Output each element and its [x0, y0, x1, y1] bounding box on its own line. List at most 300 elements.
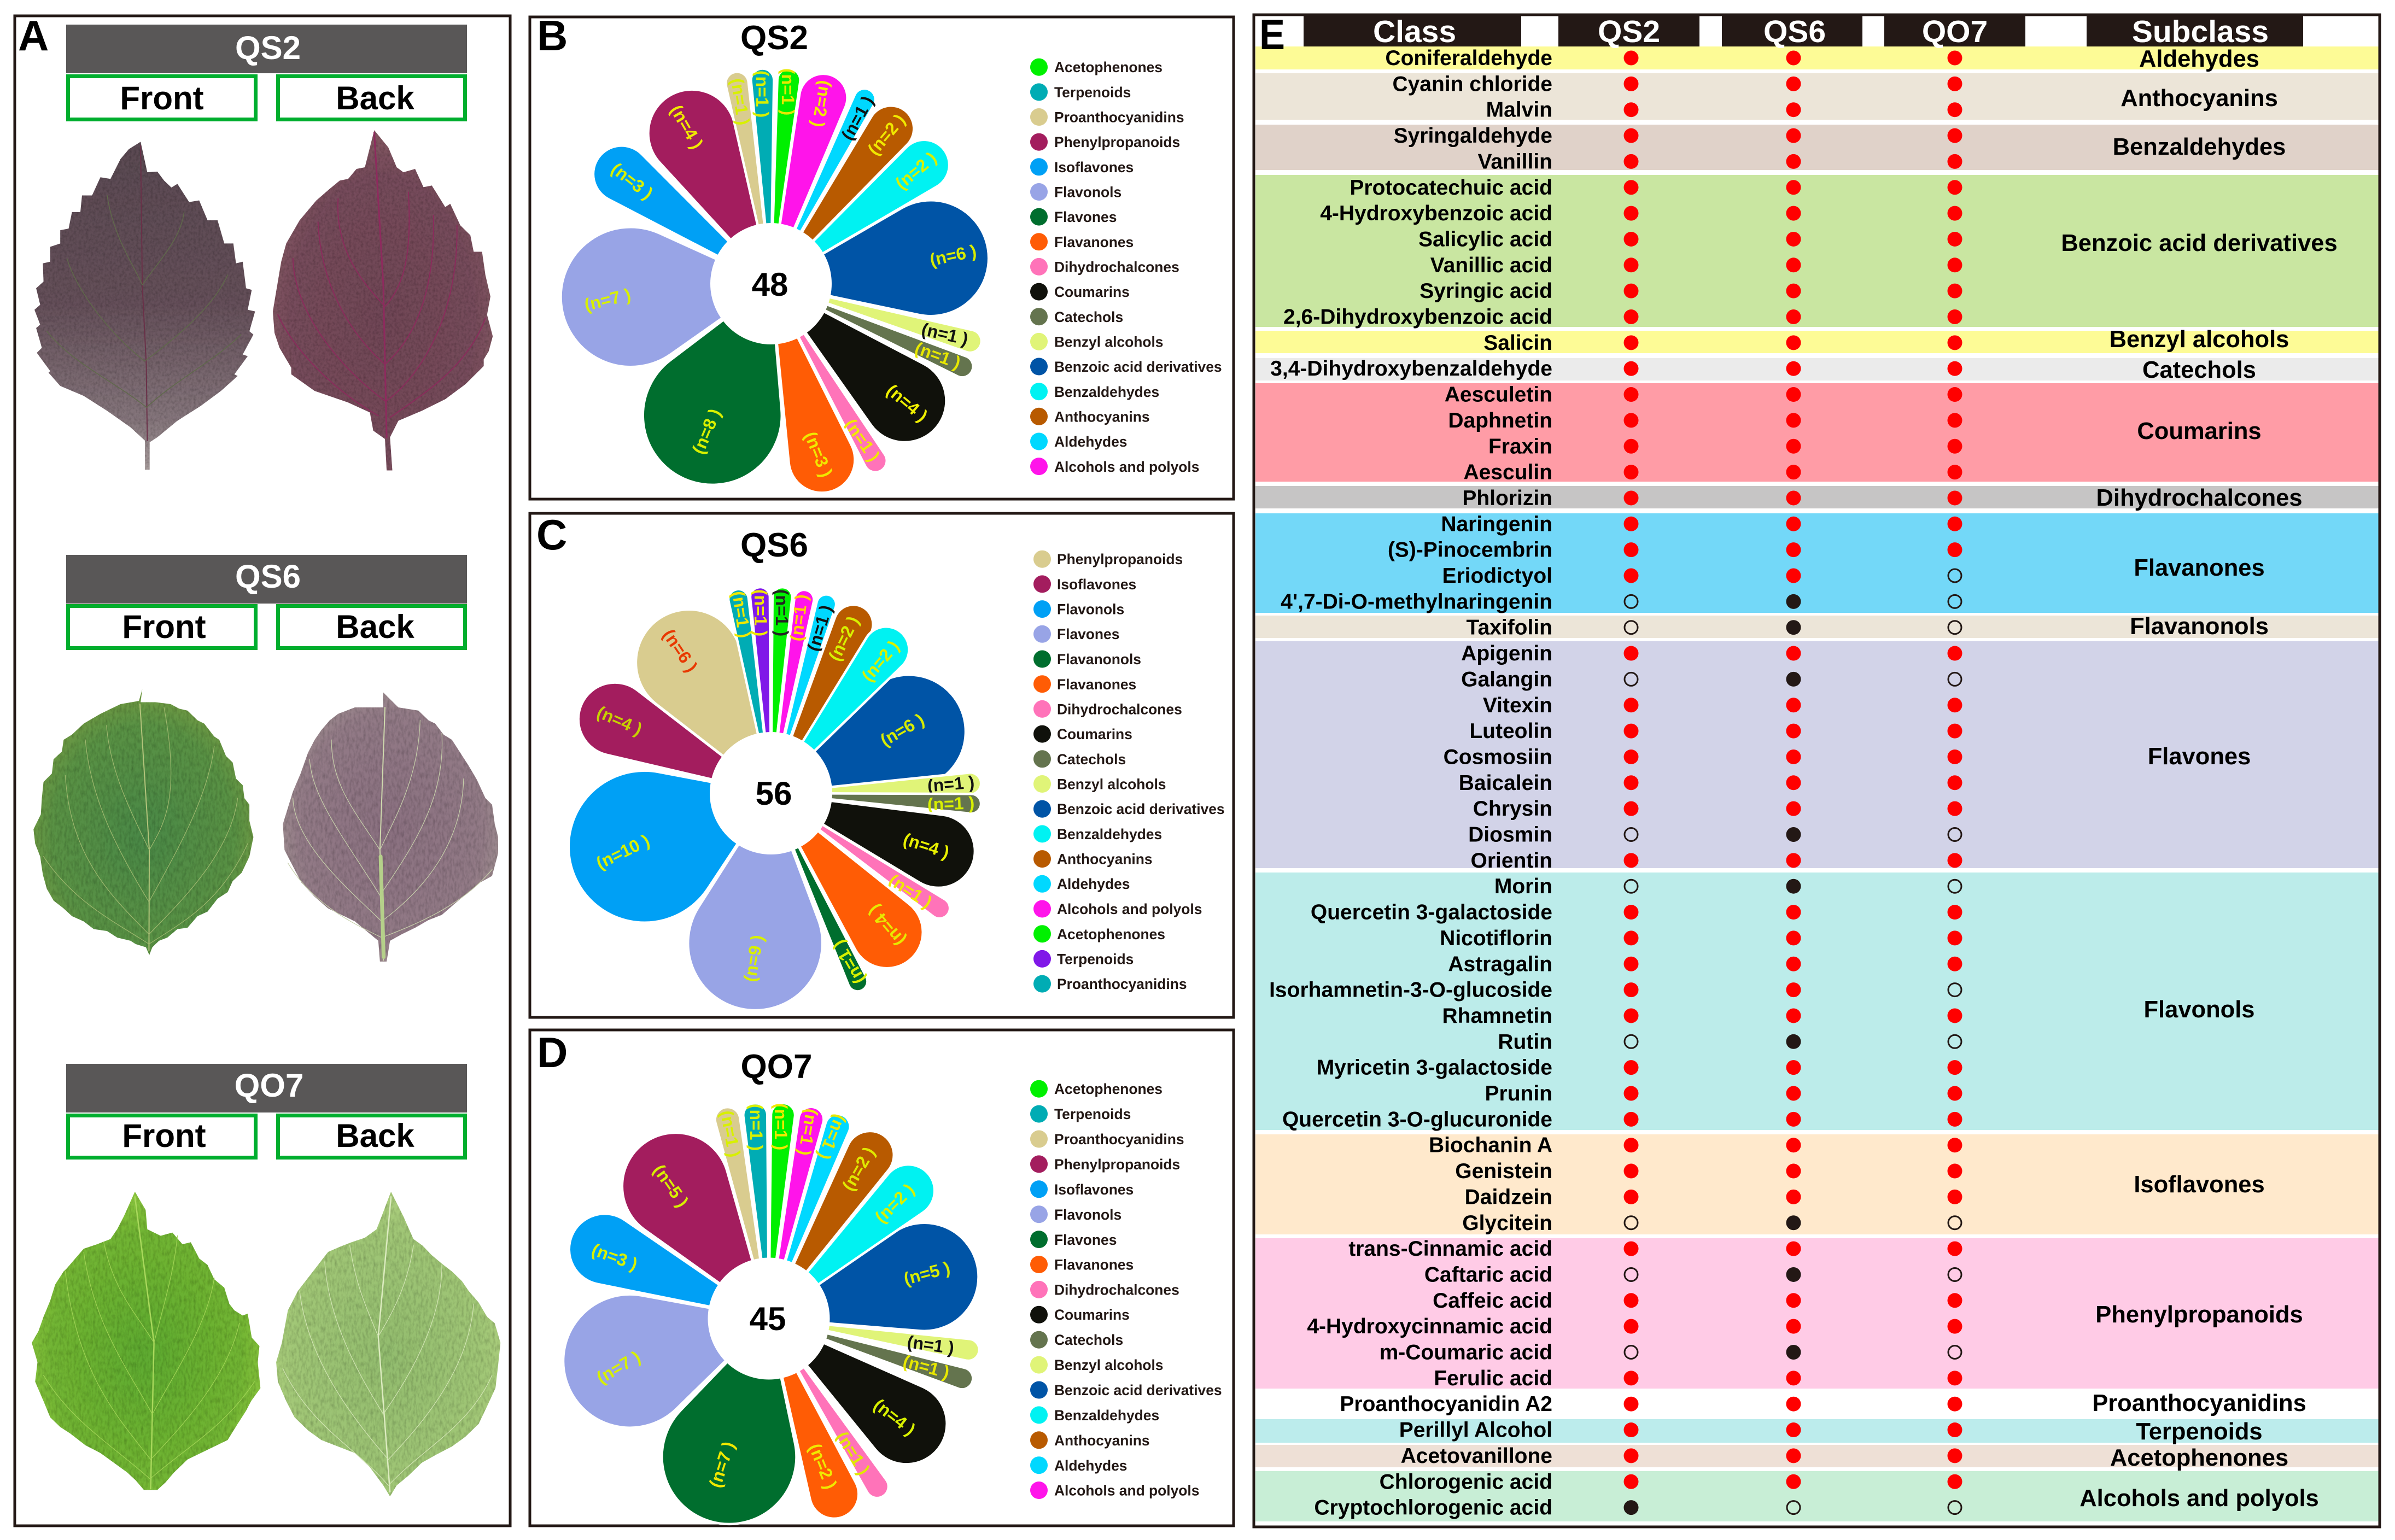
subclass: Dihydrochalcones: Dihydrochalcones — [2096, 485, 2303, 511]
petal: Flavonols — [547, 1255, 788, 1444]
row: Cosmosiin — [1444, 745, 1962, 769]
subclass: Coumarins: Coumarins — [2137, 418, 2262, 444]
petal: Flavonols — [545, 723, 801, 946]
legend: QS6 classes — [1033, 551, 1225, 993]
row: Biochanin A — [1429, 1134, 1962, 1157]
legend: Benzoic acid derivatives: Benzoic acid derivatives — [1054, 1382, 1222, 1398]
header: QS6 — [66, 555, 467, 604]
petal: Isoflavones: (n=4 ) — [594, 702, 645, 739]
center circle: total 56: 56 — [756, 775, 792, 812]
row: Chlorogenic acid: Chlorogenic acid — [1380, 1470, 1552, 1494]
petal: Flavanones — [739, 274, 863, 501]
petal: Benzoic acid derivatives: (n=6 ) — [928, 241, 978, 270]
row: (S)-Pinocembrin: (S)-Pinocembrin — [1388, 538, 1552, 562]
row: Astragalin — [1448, 952, 1962, 976]
row: Vitexin — [1483, 694, 1962, 717]
subclass: Anthocyanins: Anthocyanins — [2121, 85, 2278, 112]
petal: Dihydrochalcones: (n=1 ) — [841, 415, 884, 465]
petal: Dihydrochalcones — [759, 1313, 893, 1502]
legend: Flavonols — [1030, 1205, 1121, 1223]
row: 4',7-Di-O-methylnaringenin: 4',7-Di-O-methylnaringenin — [1281, 590, 1552, 613]
table frame — [1254, 15, 2380, 1527]
row: 4',7-Di-O-methylnaringenin — [1281, 590, 1961, 613]
petal: Benzoic acid derivatives — [762, 192, 997, 341]
row: Caftaric acid — [1424, 1263, 1961, 1286]
panel letter E: E — [1259, 10, 1285, 58]
row: Eriodictyol: Eriodictyol — [1442, 564, 1552, 588]
petal: Terpenoids — [743, 1103, 781, 1319]
row: Genistein — [1455, 1160, 1962, 1183]
petal: Anthocyanins: (n=2 ) — [825, 613, 863, 664]
row: Salicin — [1483, 331, 1962, 355]
petal: Flavanones: (n=3 ) — [801, 429, 837, 480]
petal: Alcohols and polyols — [757, 1105, 826, 1321]
legend: Acetophenones: Acetophenones — [1054, 59, 1163, 75]
petal: Aldehydes — [757, 1110, 854, 1323]
petal: Benzyl alcohols — [768, 273, 984, 355]
subclass: Benzaldehydes: Benzaldehydes — [2113, 134, 2286, 160]
row: Salicin: Salicin — [1483, 331, 1552, 355]
row: Myricetin 3-galactoside — [1317, 1056, 1962, 1080]
band: Flavonols — [1255, 873, 2379, 1130]
petal: Anthocyanins — [753, 598, 880, 802]
row: Luteolin — [1469, 719, 1962, 743]
row: Rhamnetin: Rhamnetin — [1442, 1004, 1552, 1028]
panel C: QS6 petal chart — [530, 511, 1234, 1017]
row: Cyanin chloride — [1392, 72, 1962, 96]
petal: Proanthocyanidins: (n=1 ) — [727, 77, 753, 126]
band: Isoflavones — [1255, 1134, 2379, 1234]
legend: Flavanones: Flavanones — [1054, 234, 1134, 250]
band: Coumarins — [1255, 383, 2379, 482]
subclass: Benzyl alcohols: Benzyl alcohols — [2110, 326, 2289, 353]
row: Protocatechuic acid: Protocatechuic acid — [1350, 176, 1552, 200]
row: Proanthocyanidin A2 — [1340, 1392, 1962, 1416]
petal: Isoflavones: (n=3 ) — [589, 1239, 640, 1274]
legend: Phenylpropanoids: Phenylpropanoids — [1057, 551, 1183, 567]
header: QS6: QS6 — [1763, 14, 1826, 49]
band: Phenylpropanoids — [1255, 1238, 2379, 1389]
row: Salicylic acid — [1418, 227, 1962, 251]
petal: Coumarins — [744, 1286, 963, 1480]
petal: Coumarins: (n=4 ) — [870, 1395, 919, 1439]
header: QO7: QO7 — [235, 1067, 303, 1104]
subclass labels — [2061, 46, 2338, 1512]
petal: Benzyl alcohols — [770, 772, 982, 804]
legend: Flavanones: Flavanones — [1057, 676, 1136, 693]
row: Genistein: Genistein — [1455, 1160, 1552, 1183]
row: Rutin: Rutin — [1498, 1030, 1552, 1053]
row: trans-Cinnamic acid — [1348, 1237, 1962, 1261]
petal: Flavonols: (n=10 ) — [593, 830, 653, 873]
label: QO7 Back: Back — [336, 1117, 414, 1154]
row: Galangin: Galangin — [1461, 667, 1552, 691]
label: QS2 Front: Front — [120, 80, 204, 116]
leaf photo: QS6 back — [283, 693, 498, 962]
petal: Catechols: (n=1 ) — [901, 1351, 951, 1383]
petal: Phenylpropanoids — [633, 74, 810, 304]
legend: Flavones — [1030, 1231, 1117, 1248]
row: Protocatechuic acid — [1350, 176, 1962, 200]
petal: Catechols — [766, 1308, 975, 1392]
petal: Aldehydes: (n=1 ) — [837, 93, 878, 143]
row: Daphnetin — [1448, 409, 1962, 432]
row: Biochanin A: Biochanin A — [1429, 1134, 1552, 1157]
legend: Flavonols — [1030, 183, 1121, 201]
legend: Proanthocyanidins: Proanthocyanidins — [1054, 109, 1184, 126]
row: Eriodictyol — [1442, 564, 1961, 588]
header: QO7: QO7 — [1922, 14, 1988, 49]
center circle: total 48 — [710, 223, 832, 344]
petal: Flavanones — [743, 770, 938, 983]
center circle: total 56 — [710, 732, 832, 854]
row: Caftaric acid: Caftaric acid — [1424, 1263, 1552, 1286]
row: m-Coumaric acid: m-Coumaric acid — [1380, 1340, 1552, 1365]
petal: Flavonols: (n=7 ) — [582, 284, 633, 315]
panel letter B: B — [537, 11, 568, 60]
row: Nicotiflorin: Nicotiflorin — [1440, 927, 1552, 950]
legend: Aldehydes: Aldehydes — [1054, 434, 1127, 450]
row: Cosmosiin: Cosmosiin — [1444, 745, 1552, 769]
band: Benzaldehydes — [1255, 125, 2379, 170]
petal: Aldehydes — [762, 592, 838, 796]
row: trans-Cinnamic acid: trans-Cinnamic acid — [1348, 1237, 1552, 1261]
label: QS6 Front: Front — [122, 608, 206, 645]
legend: Flavonols: Flavonols — [1057, 601, 1124, 618]
label: QO7 Front: Front — [122, 1117, 206, 1154]
label: QS2 Back: Back — [336, 80, 414, 116]
petal: Dihydrochalcones — [765, 784, 954, 923]
panel letter A: A — [18, 11, 49, 60]
row: Orientin — [1470, 849, 1962, 873]
legend: Dihydrochalcones: Dihydrochalcones — [1054, 1281, 1179, 1298]
petal: Phenylpropanoids — [616, 589, 816, 822]
center circle: total 45 — [708, 1257, 830, 1380]
legend: Isoflavones: Isoflavones — [1054, 159, 1134, 175]
row: Prunin — [1485, 1082, 1962, 1105]
row: Chlorogenic acid — [1380, 1470, 1962, 1494]
header: QS2: QS2 — [235, 30, 301, 66]
petal: Catechols — [770, 783, 982, 814]
petal: Anthocyanins — [753, 96, 923, 298]
row: Myricetin 3-galactoside: Myricetin 3-galactoside — [1317, 1056, 1552, 1080]
band: Acetophenones — [1255, 1445, 2379, 1467]
row: Daphnetin: Daphnetin — [1448, 409, 1552, 432]
legend: Benzaldehydes: Benzaldehydes — [1054, 384, 1159, 400]
row: Malvin: Malvin — [1486, 98, 1552, 122]
row: Syringaldehyde: Syringaldehyde — [1394, 124, 1552, 148]
petal: Acetophenones — [761, 587, 793, 794]
row: Cyanin chloride: Cyanin chloride — [1392, 72, 1552, 96]
leaf photo: QS2 back — [273, 130, 493, 471]
petal: Benzyl alcohols — [767, 1308, 981, 1362]
legend: Catechols: Catechols — [1057, 751, 1126, 768]
legend: Aldehydes: Aldehydes — [1054, 1457, 1127, 1474]
petal: Flavones: (n=9 ) — [740, 933, 767, 983]
petal: Dihydrochalcones: (n=1 ) — [885, 870, 936, 912]
row: Taxifolin — [1467, 616, 1961, 640]
panel A: leaf photographs — [15, 11, 510, 1526]
petal: Alcohols and polyols: (n=1 ) — [786, 593, 811, 642]
row: Morin — [1494, 875, 1961, 898]
panel letter C: C — [536, 511, 567, 559]
petal: Isoflavones — [566, 670, 787, 827]
legend: Anthocyanins: Anthocyanins — [1054, 1432, 1149, 1449]
row: Aesculin — [1463, 461, 1962, 484]
petal: Coumarins — [744, 253, 963, 459]
petal: Isoflavones — [558, 1203, 782, 1351]
header: QS2 — [1558, 14, 1699, 49]
legend: Proanthocyanidins: Proanthocyanidins — [1054, 1131, 1184, 1147]
subclass: Alcohols and polyols: Alcohols and polyols — [2079, 1485, 2319, 1512]
label: QS2 Back — [278, 77, 465, 119]
petal: Flavones: (n=7 ) — [705, 1439, 738, 1490]
row: Fraxin — [1488, 435, 1962, 458]
petal: Aldehydes — [761, 85, 879, 289]
legend: Catechols — [1033, 750, 1126, 768]
petal: Proanthocyanidins — [712, 1105, 781, 1321]
row: Astragalin: Astragalin — [1448, 952, 1552, 976]
legend: Benzyl alcohols: Benzyl alcohols — [1054, 1357, 1163, 1373]
petal: Flavones — [681, 786, 838, 1017]
petal: Anthocyanins — [749, 1122, 903, 1331]
petal: Terpenoids — [751, 68, 782, 284]
subclass: Flavanonols: Flavanonols — [2130, 613, 2269, 640]
band: Alcohols and polyols — [1255, 1471, 2379, 1521]
petal: Benzyl alcohols: (n=1 ) — [926, 772, 975, 796]
legend: Dihydrochalcones: Dihydrochalcones — [1054, 259, 1179, 276]
petal: Benzaldehydes: (n=2 ) — [891, 148, 941, 194]
row: Naringenin: Naringenin — [1441, 512, 1552, 536]
row: Daidzein — [1465, 1185, 1962, 1209]
header: QS6 — [1722, 14, 1862, 49]
row: Perillyl Alcohol: Perillyl Alcohol — [1399, 1419, 1552, 1442]
leaf photo: QO7 front — [32, 1192, 260, 1490]
legend: Flavones — [1030, 208, 1117, 226]
legend: Acetophenones: Acetophenones — [1057, 926, 1165, 942]
band: Flavanones — [1255, 513, 2379, 613]
legend: Anthocyanins: Anthocyanins — [1057, 851, 1153, 867]
legend: Proanthocyanidins: Proanthocyanidins — [1057, 976, 1187, 992]
legend: Alcohols and polyols: Alcohols and polyols — [1054, 459, 1199, 475]
legend: Anthocyanins: Anthocyanins — [1054, 409, 1149, 425]
legend: Alcohols and polyols: Alcohols and polyols — [1054, 1483, 1199, 1499]
petal: Alcohols and polyols — [748, 68, 853, 290]
legend: Phenylpropanoids: Phenylpropanoids — [1054, 134, 1180, 150]
row: Diosmin — [1468, 823, 1961, 846]
row: Diosmin: Diosmin — [1468, 823, 1552, 846]
row: Cryptochlorogenic acid: Cryptochlorogenic acid — [1314, 1496, 1552, 1520]
row: Aesculetin — [1445, 383, 1962, 407]
panel D: QO7 petal chart — [530, 1028, 1234, 1540]
subclass: Flavones: Flavones — [2148, 743, 2251, 770]
legend: Coumarins: Coumarins — [1054, 1307, 1130, 1323]
subclass: Proanthocyanidins: Proanthocyanidins — [2092, 1390, 2306, 1416]
legend: Benzaldehydes: Benzaldehydes — [1054, 1407, 1159, 1424]
chart title: QO7: QO7 — [741, 1048, 812, 1086]
row: Acetovanillone: Acetovanillone — [1401, 1444, 1552, 1468]
row: Acetovanillone — [1401, 1444, 1962, 1468]
label: QO7 Front — [68, 1115, 256, 1158]
row: 4-Hydroxycinnamic acid: 4-Hydroxycinnamic acid — [1307, 1315, 1552, 1338]
petal: Acetophenones: (n=1 ) — [778, 68, 798, 115]
row: Fraxin: Fraxin — [1488, 435, 1552, 458]
subclass: Isoflavones: Isoflavones — [2134, 1172, 2265, 1198]
flower chart: QS6 — [545, 587, 985, 1017]
petal: Coumarins: (n=4 ) — [883, 380, 932, 426]
petal: Catechols — [767, 274, 977, 381]
legend: Isoflavones: Isoflavones — [1054, 1181, 1134, 1198]
subclass: Terpenoids: Terpenoids — [2136, 1419, 2263, 1445]
row: 3,4-Dihydroxybenzaldehyde — [1270, 357, 1962, 380]
petal: Acetophenones: (n=1 ) — [772, 589, 792, 636]
row: Quercetin 3-galactoside — [1311, 901, 1962, 924]
petal: Flavanones — [746, 1310, 866, 1526]
subclass: Catechols: Catechols — [2142, 357, 2256, 383]
petal: Flavanonols: (n=1 ) — [828, 937, 869, 987]
row: Perillyl Alcohol — [1399, 1419, 1962, 1442]
header: Subclass — [2087, 14, 2303, 49]
legend: Flavones: Flavones — [1054, 209, 1117, 225]
row: Apigenin — [1461, 642, 1962, 665]
petal: Phenylpropanoids: (n=5 ) — [650, 1161, 692, 1211]
row: Phlorizin — [1462, 487, 1962, 510]
legend: Flavonols: Flavonols — [1054, 1207, 1121, 1223]
petal: Dihydrochalcones: (n=1 ) — [832, 1428, 874, 1478]
band: Catechols — [1255, 358, 2379, 380]
label: QO7 Back — [278, 1115, 465, 1158]
legend: Alcohols and polyols: Alcohols and polyols — [1057, 901, 1202, 917]
legend: QS2 classes — [1030, 58, 1222, 475]
petal: Phenylpropanoids: (n=4 ) — [667, 102, 707, 152]
row: 4-Hydroxycinnamic acid — [1307, 1315, 1962, 1338]
row: Galangin — [1461, 667, 1961, 691]
petal: Anthocyanins: (n=2 ) — [838, 1144, 879, 1194]
petal: Benzaldehydes — [756, 130, 960, 303]
legend: Flavones: Flavones — [1054, 1232, 1117, 1248]
label: QS6 Back — [278, 606, 465, 648]
row: Salicylic acid: Salicylic acid — [1418, 227, 1552, 251]
band: Benzyl alcohols — [1255, 331, 2379, 353]
flower chart: QS2 — [554, 68, 997, 507]
band: Flavones — [1255, 641, 2379, 868]
row: 2,6-Dihydroxybenzoic acid — [1283, 305, 1962, 329]
row: 4-Hydroxybenzoic acid: 4-Hydroxybenzoic acid — [1320, 202, 1552, 225]
petal: Proanthocyanidins — [724, 70, 782, 286]
petal: Anthocyanins: (n=2 ) — [863, 110, 909, 159]
petal: Terpenoids: (n=1 ) — [746, 1104, 766, 1151]
row: Prunin: Prunin — [1485, 1082, 1552, 1105]
row: Morin: Morin — [1494, 875, 1552, 898]
row: Malvin — [1486, 98, 1962, 122]
petal: Coumarins — [759, 759, 985, 898]
legend: Terpenoids: Terpenoids — [1054, 84, 1131, 101]
petal: Flavanones: (n=2 ) — [805, 1441, 841, 1492]
petal: Dihydrochalcones — [761, 278, 891, 477]
header: Class: Class — [1373, 14, 1456, 49]
petal: Benzoic acid derivatives: (n=6 ) — [877, 710, 927, 750]
legend: Benzaldehydes: Benzaldehydes — [1057, 826, 1162, 842]
subclass: Flavonols: Flavonols — [2143, 997, 2255, 1023]
petal: Benzoic acid derivatives — [755, 1211, 991, 1371]
row: Taxifolin: Taxifolin — [1467, 616, 1552, 640]
label: QS6 Front — [68, 606, 256, 648]
legend: Flavonols — [1033, 600, 1124, 618]
petal: Alcohols and polyols — [761, 588, 815, 795]
petal: Flavonols: (n=7 ) — [593, 1347, 644, 1387]
legend: Flavones: Flavones — [1057, 626, 1119, 642]
band: Flavanonols — [1255, 616, 2379, 638]
petal: Proanthocyanidins: (n=1 ) — [728, 590, 755, 639]
panel B: QS2 petal chart — [530, 11, 1234, 507]
legend: Catechols: Catechols — [1054, 1332, 1123, 1348]
row: Vanillin — [1477, 150, 1962, 173]
row: Syringic acid — [1420, 279, 1962, 303]
chart title: QS2: QS2 — [740, 19, 808, 57]
legend: Aldehydes: Aldehydes — [1057, 876, 1130, 892]
row: Caffeic acid: Caffeic acid — [1433, 1289, 1552, 1313]
row: Glycitein — [1462, 1211, 1961, 1235]
subclass: Acetophenones: Acetophenones — [2110, 1445, 2288, 1471]
legend: Terpenoids: Terpenoids — [1057, 951, 1134, 968]
petal: Proanthocyanidins: (n=1 ) — [717, 1109, 744, 1159]
petal: Benzoic acid derivatives: (n=5 ) — [902, 1257, 952, 1289]
petal: Terpenoids — [750, 587, 781, 794]
row: Quercetin 3-O-glucuronide: Quercetin 3-O-glucuronide — [1282, 1108, 1552, 1131]
header: Subclass: Subclass — [2132, 14, 2269, 49]
center circle: total 48: 48 — [752, 266, 788, 303]
header: Class — [1304, 14, 1521, 49]
row: Glycitein: Glycitein — [1462, 1211, 1552, 1235]
header: QS6: QS6 — [235, 558, 301, 595]
band: Anthocyanins — [1255, 73, 2379, 120]
row: Quercetin 3-O-glucuronide — [1282, 1108, 1962, 1131]
petal: Flavones — [646, 1300, 833, 1540]
petal: Isoflavones — [582, 134, 788, 307]
petal: Benzaldehydes — [753, 617, 919, 807]
petal: Benzaldehydes — [751, 1153, 945, 1338]
row: Ferulic acid — [1434, 1367, 1962, 1390]
row: (S)-Pinocembrin — [1388, 538, 1962, 562]
row: Coniferaldehyde: Coniferaldehyde — [1385, 46, 1552, 70]
row: Aesculetin: Aesculetin — [1445, 383, 1552, 407]
header: QO7 — [66, 1064, 467, 1112]
petal: Aldehydes: (n=1 ) — [803, 603, 836, 653]
subclass: Benzoic acid derivatives: Benzoic acid derivatives — [2061, 230, 2338, 256]
petal: Benzaldehydes: (n=2 ) — [857, 636, 903, 686]
legend: Benzyl alcohols: Benzyl alcohols — [1057, 776, 1166, 793]
legend: QO7 classes — [1030, 1080, 1222, 1499]
petal: Phenylpropanoids — [601, 1111, 813, 1349]
subclass: Flavanones: Flavanones — [2134, 555, 2265, 581]
flower chart: QO7 — [547, 1102, 991, 1540]
row: 3,4-Dihydroxybenzaldehyde: 3,4-Dihydroxybenzaldehyde — [1270, 357, 1552, 380]
row: Proanthocyanidin A2: Proanthocyanidin A2 — [1340, 1392, 1552, 1416]
row: Isorhamnetin-3-O-glucoside: Isorhamnetin-3-O-glucoside — [1269, 979, 1552, 1002]
row: Apigenin: Apigenin — [1461, 642, 1552, 665]
petal: Terpenoids: (n=1 ) — [751, 589, 770, 636]
legend: Isoflavones: Isoflavones — [1057, 576, 1136, 593]
row: Baicalein — [1459, 771, 1962, 795]
chart title: QS6: QS6 — [740, 526, 808, 564]
header: QO7 — [1884, 14, 2025, 49]
petal: Benzoic acid derivatives — [748, 657, 984, 845]
row: Aesculin: Aesculin — [1463, 461, 1552, 484]
petal: Acetophenones: (n=1 ) — [771, 1103, 791, 1150]
header: QS2 — [66, 25, 467, 73]
petal: Benzaldehydes: (n=2 ) — [871, 1180, 918, 1227]
row: Coniferaldehyde — [1385, 46, 1962, 70]
